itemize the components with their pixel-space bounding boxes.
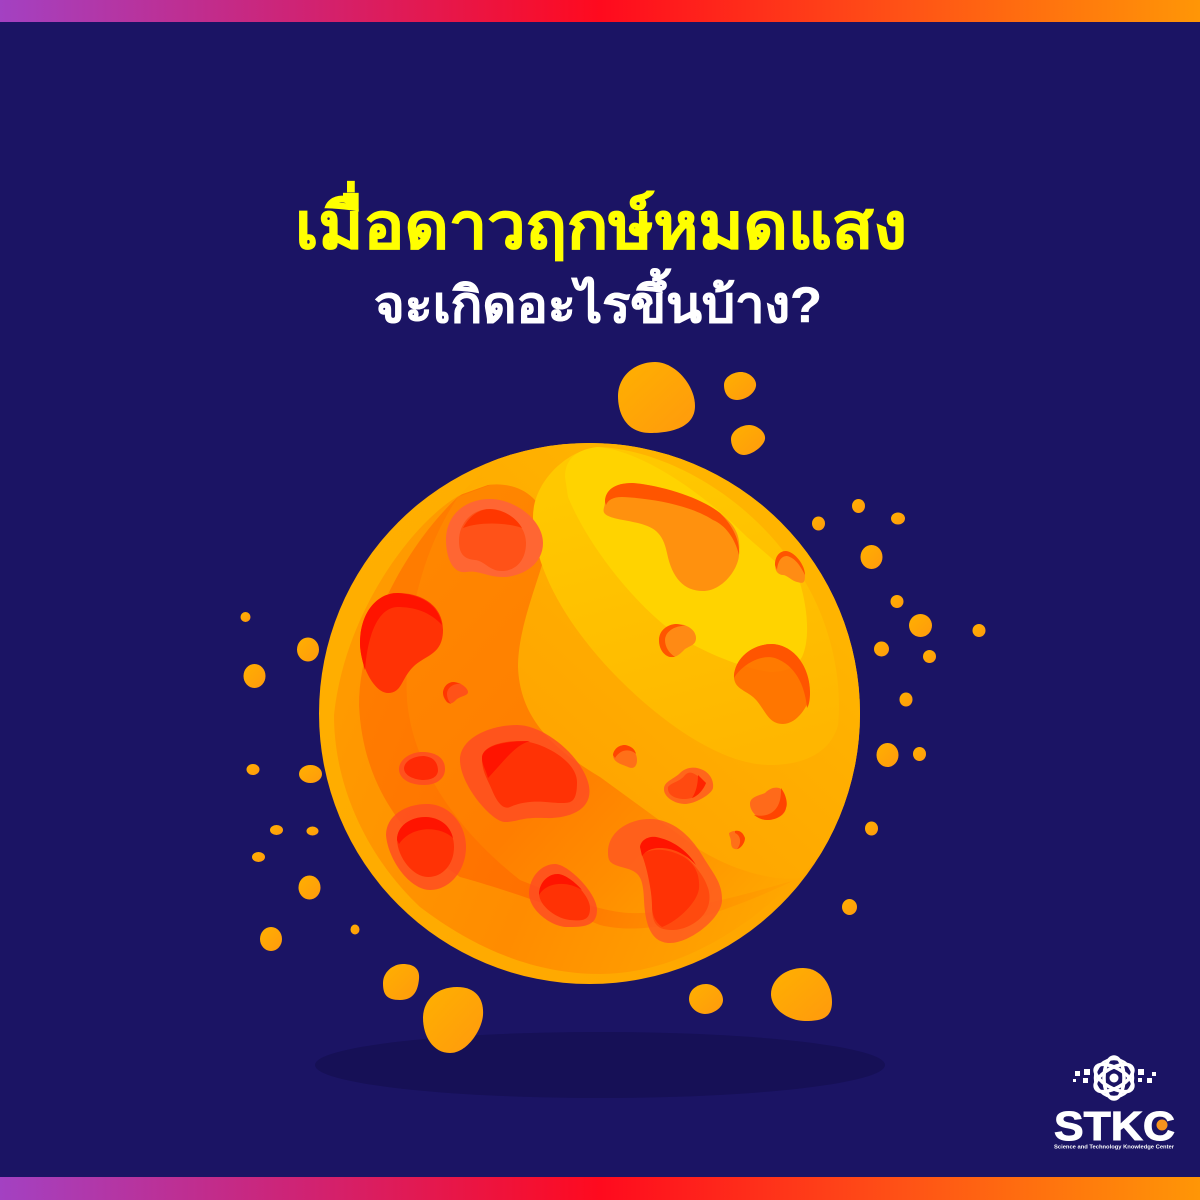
- small particles left: [240, 612, 360, 951]
- logo pixel squares: [1073, 1069, 1156, 1083]
- crater: right orange: [734, 644, 810, 724]
- sun base disc: [319, 443, 860, 984]
- crater: tiny left: [443, 682, 468, 704]
- crater: lower-left with halo: [386, 804, 466, 890]
- crater: lower-right small: [750, 788, 787, 820]
- crater: small centre-right: [613, 745, 637, 768]
- bottom gradient bar: [0, 1177, 1200, 1200]
- crater: upper yellow: [604, 483, 739, 591]
- logo orange dot: [1156, 1120, 1168, 1130]
- sun: [319, 430, 880, 984]
- crater: lobed with halo: [664, 768, 713, 804]
- crater: bottom with halo: [529, 864, 597, 927]
- sun surface shading: [334, 430, 880, 974]
- crater: tiny lower-right: [729, 831, 745, 849]
- logo caption: Science and Technology Knowledge Center: [1054, 1144, 1175, 1150]
- small particles right: [812, 499, 986, 915]
- large particle top: [618, 362, 695, 433]
- crater: small right edge: [775, 551, 805, 583]
- crater: small mid-left with halo: [399, 752, 445, 785]
- crater: top-left with halo: [446, 499, 543, 577]
- title: [295, 181, 907, 333]
- logo wordmark: STKC: [1054, 1103, 1175, 1149]
- title line 1: เมื่อดาวฤกษ์หมดแสง: [295, 181, 907, 262]
- medium particles top: [724, 372, 765, 455]
- top gradient bar: [0, 0, 1200, 22]
- ground shadow: [315, 1032, 885, 1098]
- crater: small centre yellow: [659, 624, 696, 657]
- logo atom icon: [1091, 1057, 1137, 1099]
- large particles bottom: [383, 964, 832, 1053]
- title line 2: จะเกิดอะไรขึ้นบ้าง?: [374, 268, 822, 333]
- crater: large lower-right with halo: [608, 819, 722, 943]
- floating debris particles: [240, 362, 986, 1053]
- STKC logo: [1054, 1057, 1175, 1150]
- crater: large left red: [360, 593, 443, 693]
- crater: large centre with halo: [460, 725, 589, 822]
